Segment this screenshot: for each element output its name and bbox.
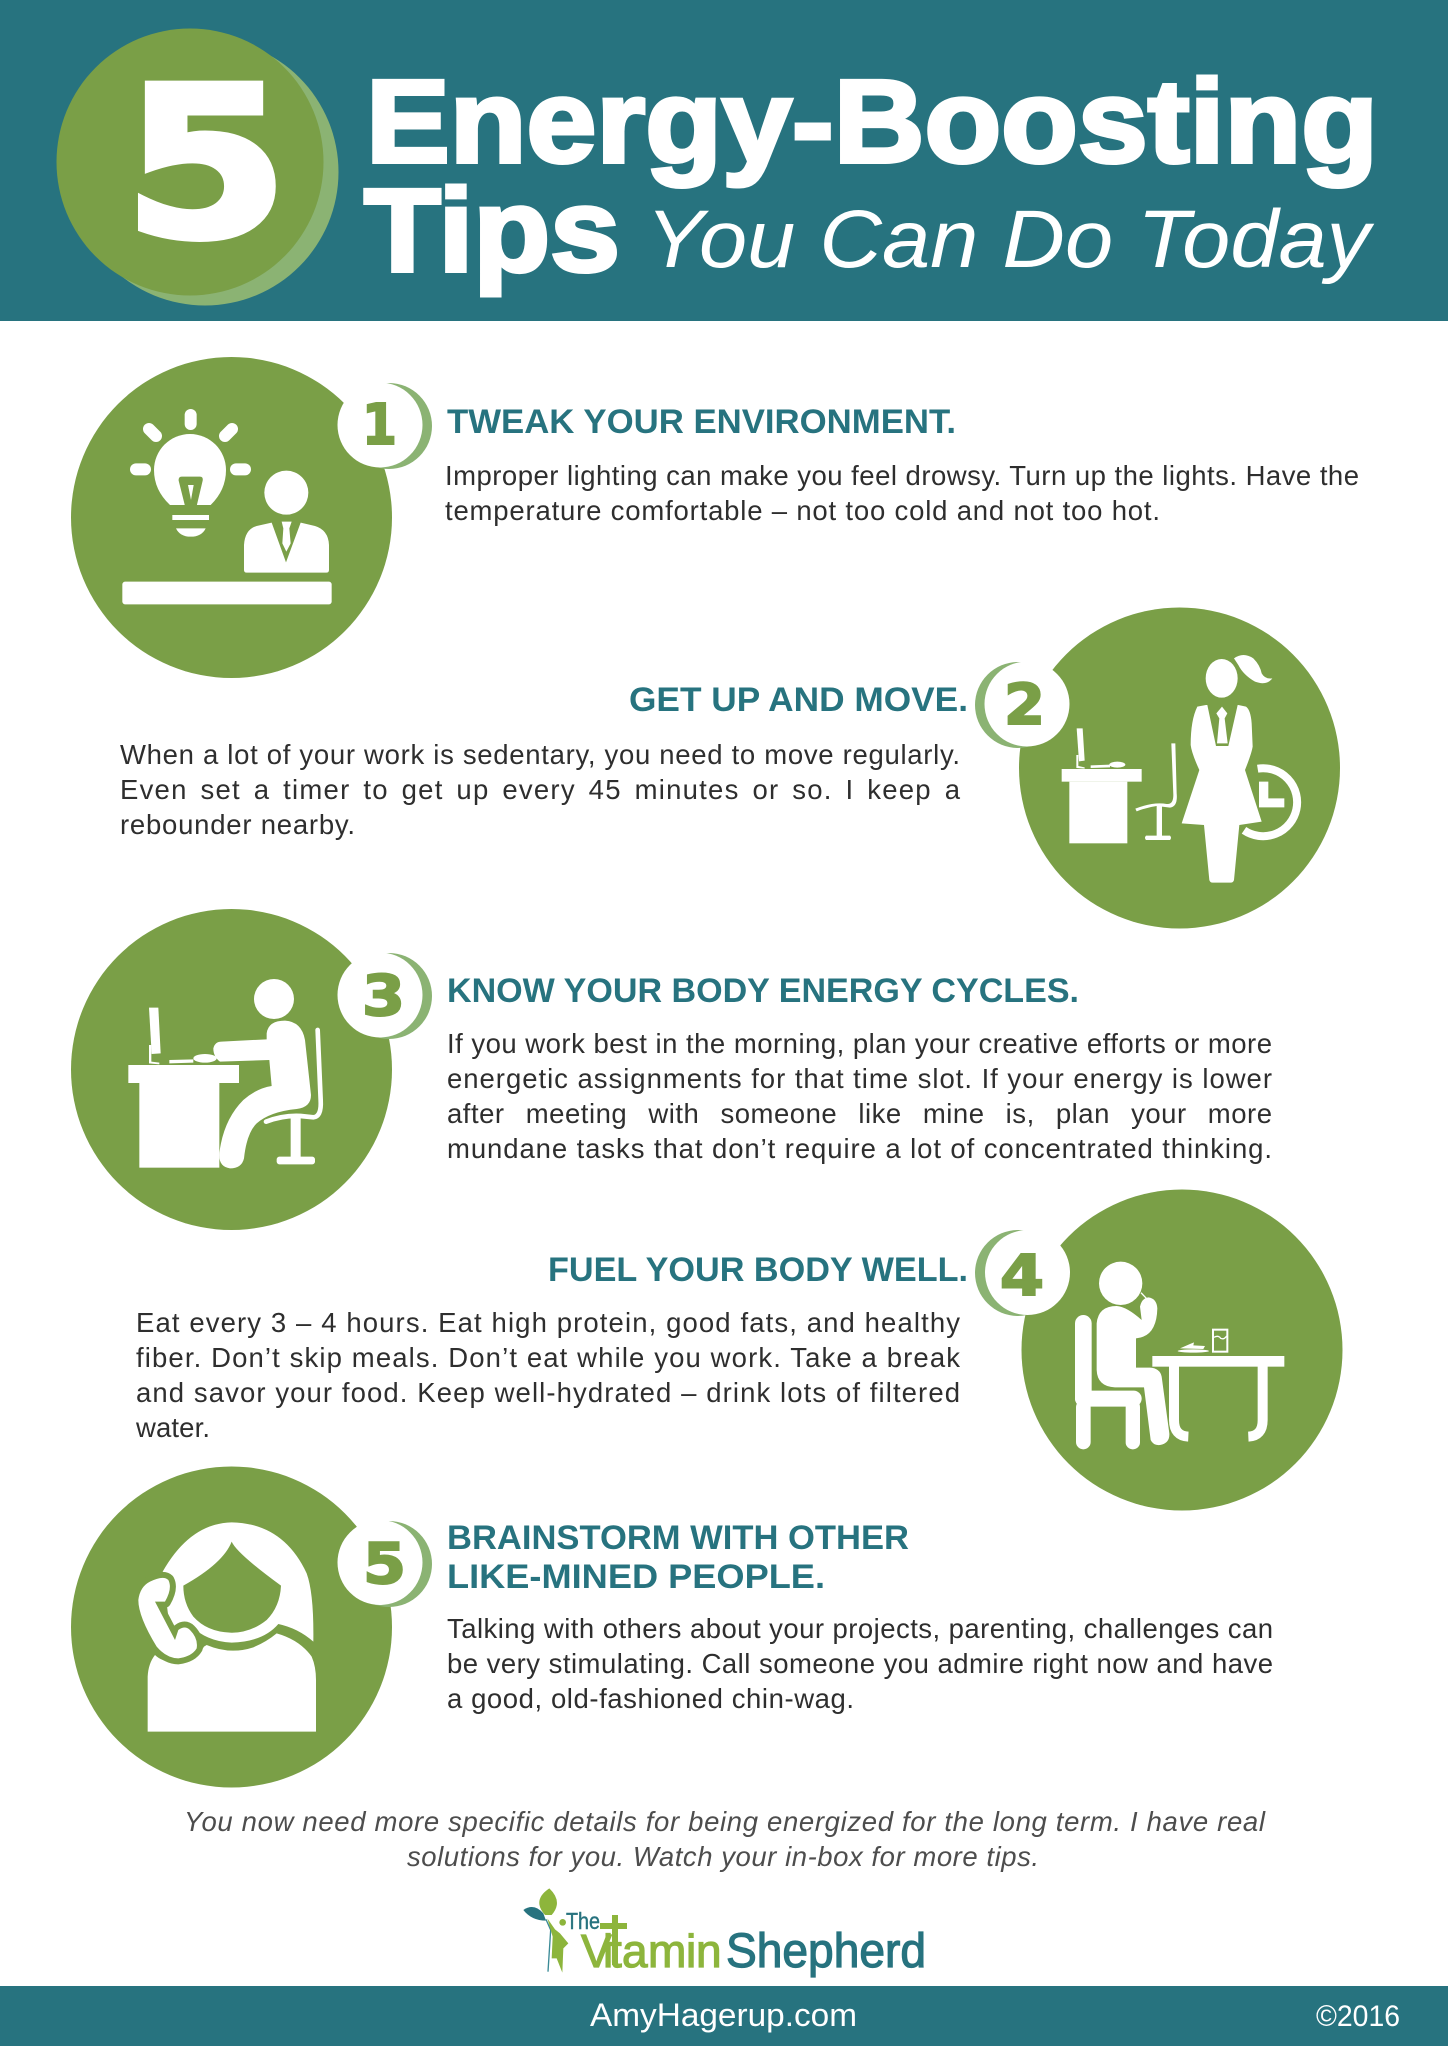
tip 4 body text: water. xyxy=(135,1412,210,1443)
tip 1 number badge: 1 xyxy=(362,393,397,458)
tip 5 heading xyxy=(447,1519,909,1596)
tip 4 heading: FUEL YOUR BODY WELL. xyxy=(548,1251,968,1289)
tip 2 body text: rebounder nearby. xyxy=(120,809,355,840)
tip 3 body text: mundane tasks that don’t require a lot of concentrated thinking. xyxy=(447,1133,1272,1164)
tip 3 body text: energetic assignments for that time slot. If your energy is lower xyxy=(447,1063,1272,1094)
tip 1 body text xyxy=(445,460,1359,526)
tip 5 body text: be very stimulating. Call someone you admire right now and have xyxy=(447,1648,1273,1679)
tip 3 number badge: 3 xyxy=(362,964,405,1029)
title xyxy=(364,56,1378,297)
closing note: You now need more specific details for being energized for the long term. I have real xyxy=(184,1806,1266,1837)
tip 3 icon: person typing at desk xyxy=(71,909,392,1230)
tip 4 number badge xyxy=(975,1230,1070,1316)
tip 2 panel xyxy=(120,608,1340,928)
title: You Can Do Today xyxy=(646,194,1375,285)
tip 3 heading: KNOW YOUR BODY ENERGY CYCLES. xyxy=(447,972,1079,1010)
tip 1 heading: TWEAK YOUR ENVIRONMENT. xyxy=(447,403,956,441)
tip 4 icon: person eating at table xyxy=(1022,1190,1342,1510)
tip 1 number badge xyxy=(338,382,432,469)
tip 5 icon: woman on the phone xyxy=(71,1466,392,1788)
tip 3 body text xyxy=(447,1028,1272,1164)
tip 5 panel xyxy=(71,1466,1273,1788)
tip 5 body text: Talking with others about your projects, parenting, challenges can xyxy=(447,1613,1273,1644)
tip 4 body text: and savor your food. Keep well-hydrated – drink lots of filtered xyxy=(136,1377,960,1408)
header banner xyxy=(0,0,1448,321)
tip 5 heading: BRAINSTORM WITH OTHER xyxy=(447,1519,909,1557)
tip 1 icon: light bulb and person at desk xyxy=(71,357,392,678)
tip 5 body text: a good, old-fashioned chin-wag. xyxy=(447,1683,854,1714)
logo: The Vitamin Shepherd xyxy=(523,1888,926,1978)
tip 2 icon: woman standing beside desk with clock xyxy=(1019,608,1340,928)
tip 2 number badge: 2 xyxy=(1004,673,1045,738)
tip 4 body text xyxy=(135,1307,960,1443)
tip 2 body text: When a lot of your work is sedentary, you need to move regularly. xyxy=(120,739,960,770)
tip 4 body text: fiber. Don’t skip meals. Don’t eat while you work. Take a break xyxy=(136,1342,960,1373)
tip 3 body text: after meeting with someone like mine is, plan your more xyxy=(447,1098,1272,1129)
big number 5 badge: 5 xyxy=(123,43,289,286)
tip 2 body text xyxy=(120,739,961,840)
tip 2 heading: GET UP AND MOVE. xyxy=(629,681,968,719)
copyright: ©2016 xyxy=(1316,2000,1400,2033)
logo: The Vitamin Shepherd: The xyxy=(566,1908,600,1934)
closing note: solutions for you. Watch your in-box for more tips. xyxy=(407,1841,1039,1872)
tip 4 number badge: 4 xyxy=(1000,1244,1044,1309)
footer bar xyxy=(0,1986,1448,2046)
tip 5 heading: LIKE-MINED PEOPLE. xyxy=(447,1558,825,1596)
tip 3 number badge xyxy=(338,952,432,1039)
tip 1 body text: temperature comfortable – not too cold and not too hot. xyxy=(445,495,1160,526)
tip 1 panel xyxy=(71,357,1359,678)
logo: The Vitamin Shepherd: Shepherd xyxy=(726,1925,926,1978)
tip 5 body text xyxy=(447,1613,1273,1714)
tip 4 panel xyxy=(135,1190,1342,1510)
tip 3 body text: If you work best in the morning, plan your creative efforts or more xyxy=(447,1028,1272,1059)
logo: The Vitamin Shepherd: Vitamin xyxy=(581,1925,722,1977)
website address: AmyHagerup.com xyxy=(590,1997,857,2033)
tip 5 number badge xyxy=(338,1520,432,1607)
title: Energy-Boosting xyxy=(366,56,1378,188)
tip 4 body text: Eat every 3 – 4 hours. Eat high protein, good fats, and healthy xyxy=(136,1307,960,1338)
closing note xyxy=(184,1806,1266,1872)
tip 2 number badge xyxy=(975,662,1070,748)
big number 5 badge xyxy=(56,28,338,306)
tip 5 number badge: 5 xyxy=(363,1532,406,1597)
tip 2 body text: Even set a timer to get up every 45 minutes or so. I keep a xyxy=(120,774,961,805)
tip 3 panel xyxy=(71,909,1272,1230)
title: Tips xyxy=(364,165,620,297)
tip 1 body text: Improper lighting can make you feel drowsy. Turn up the lights. Have the xyxy=(445,460,1359,491)
